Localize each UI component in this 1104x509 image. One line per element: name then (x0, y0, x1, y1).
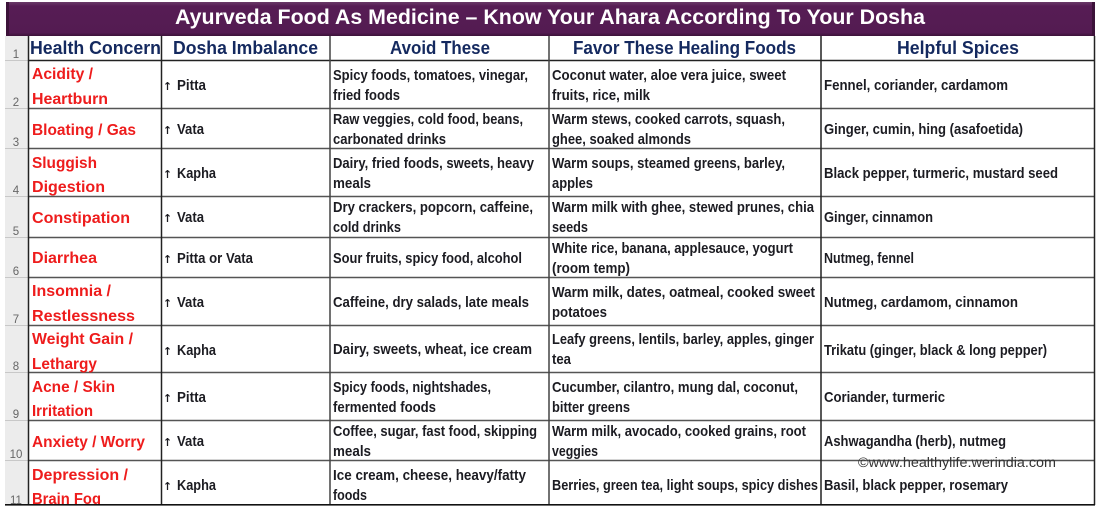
column: helpful spices: Basil, black pepper, rosemary (824, 477, 1009, 494)
column: health concern: Heartburn (32, 91, 108, 108)
column: dosha imbalance: ↑ (163, 212, 172, 225)
row numbers: 1 (13, 49, 19, 61)
row numbers: 7 (13, 314, 19, 326)
column: dosha imbalance: ↑ (163, 436, 172, 449)
column: favor these healing foods: Warm milk, dates, oatmeal, cooked sweet (552, 284, 815, 301)
column: dosha imbalance: ↑ (163, 392, 172, 405)
header row: Health Concern (30, 37, 161, 58)
column: avoid these: foods (333, 487, 367, 504)
column: avoid these: Spicy foods, nightshades, (333, 379, 491, 396)
column: dosha imbalance: ↑ (163, 345, 172, 358)
column: health concern: Diarrhea (32, 250, 97, 267)
column: avoid these: Sour fruits, spicy food, alcohol (333, 250, 522, 267)
row numbers (10, 50, 22, 504)
column: health concern: Restlessness (32, 308, 135, 325)
column: dosha imbalance: Pitta or Vata (177, 250, 254, 267)
column: favor these healing foods: (room temp) (552, 260, 630, 277)
header row: Helpful Spices (897, 37, 1019, 58)
table bottom border (5, 504, 1095, 506)
column: dosha imbalance: ↑ (163, 253, 172, 266)
column: favor these healing foods: veggies (552, 443, 598, 460)
column: dosha imbalance: ↑ (163, 168, 172, 181)
column: health concern: Digestion (32, 179, 105, 196)
column: avoid these: Dry crackers, popcorn, caffeine, (333, 199, 533, 216)
column: favor these healing foods: Coconut water, aloe vera juice, sweet (552, 67, 786, 84)
column: health concern: Anxiety / Worry (32, 434, 145, 451)
column: health concern: Acidity / (32, 66, 94, 83)
column: favor these healing foods: tea (552, 351, 572, 368)
column: avoid these: Dairy, sweets, wheat, ice cream (333, 341, 532, 358)
column: helpful spices: Fennel, coriander, cardamom (824, 77, 1008, 94)
row numbers: 4 (13, 185, 20, 197)
column: favor these healing foods: apples (552, 175, 593, 192)
column: favor these healing foods: Cucumber, cilantro, mung dal, coconut, (552, 379, 798, 396)
column: dosha imbalance: Pitta (177, 77, 207, 94)
column: favor these healing foods: ghee, soaked almonds (552, 131, 691, 148)
column: favor these healing foods: Leafy greens, lentils, barley, apples, ginger (552, 331, 814, 348)
column: favor these healing foods: Warm milk with ghee, stewed prunes, chia (552, 199, 815, 216)
column: avoid these: fermented foods (333, 399, 436, 416)
column: helpful spices: Nutmeg, fennel (824, 250, 914, 267)
column: avoid these: meals (333, 175, 371, 192)
column: helpful spices: Ginger, cumin, hing (asafoetida) (824, 121, 1023, 138)
row numbers: 6 (13, 266, 19, 278)
column: helpful spices: Black pepper, turmeric, mustard seed (824, 165, 1058, 182)
column: favor these healing foods: fruits, rice, milk (552, 87, 651, 104)
header row (31, 40, 1018, 58)
column: dosha imbalance: Vata (177, 209, 205, 226)
column: health concern: Irritation (32, 403, 93, 420)
column: dosha imbalance: ↑ (163, 124, 172, 137)
column: avoid these: Ice cream, cheese, heavy/fatty (333, 467, 527, 484)
column: health concern: Insomnia / (32, 283, 112, 300)
column: favor these healing foods: Warm stews, cooked carrots, squash, (552, 111, 785, 128)
column: favor these healing foods: Berries, green tea, light soups, spicy dishes (552, 477, 818, 494)
column: helpful spices: Ashwagandha (herb), nutmeg (824, 433, 1006, 450)
title: Ayurveda Food As Medicine – Know Your Ahara According To Your Dosha (175, 5, 926, 29)
column: favor these healing foods: potatoes (552, 304, 607, 321)
column: dosha imbalance: Kapha (177, 165, 217, 182)
watermark: ©www.healthylife.werindia.com (858, 455, 1056, 470)
column: avoid these: meals (333, 443, 371, 460)
column: helpful spices: Trikatu (ginger, black & long pepper) (824, 342, 1047, 359)
column: avoid these (333, 67, 537, 504)
column: health concern: Bloating / Gas (32, 122, 136, 139)
column: avoid these: Dairy, fried foods, sweets, heavy (333, 155, 535, 172)
column: favor these healing foods: bitter greens (552, 399, 630, 416)
column: favor these healing foods (552, 67, 818, 494)
row numbers: 11 (10, 495, 22, 507)
column: avoid these: Raw veggies, cold food, beans, (333, 111, 523, 128)
column: dosha imbalance: ↑ (163, 480, 172, 493)
column: health concern: Depression / (32, 467, 129, 484)
header row: Dosha Imbalance (173, 37, 318, 58)
row numbers: 3 (13, 137, 19, 149)
column: dosha imbalance: Pitta (177, 389, 207, 406)
column: helpful spices: Nutmeg, cardamom, cinnamon (824, 294, 1018, 311)
column: helpful spices (824, 77, 1058, 494)
column: dosha imbalance: Vata (177, 433, 205, 450)
row numbers: 10 (10, 449, 22, 461)
column: avoid these: Coffee, sugar, fast food, skipping (333, 423, 537, 440)
column: health concern: Sluggish (32, 155, 97, 172)
column: health concern: Lethargy (32, 356, 97, 373)
column: dosha imbalance (163, 77, 254, 494)
column: avoid these: Spicy foods, tomatoes, vinegar, (333, 67, 528, 84)
column: dosha imbalance: ↑ (163, 297, 172, 310)
column: dosha imbalance: Kapha (177, 477, 217, 494)
row numbers: 9 (13, 409, 19, 421)
column: dosha imbalance: ↑ (163, 80, 172, 93)
row numbers: 5 (13, 226, 19, 238)
column: avoid these: cold drinks (333, 219, 401, 236)
column: favor these healing foods: White rice, banana, applesauce, yogurt (552, 240, 793, 257)
column: dosha imbalance: Kapha (177, 342, 217, 359)
column: health concern: Brain Fog (32, 491, 101, 508)
column: helpful spices: Ginger, cinnamon (824, 209, 933, 226)
title banner (6, 2, 1095, 36)
column: dosha imbalance: Vata (177, 121, 205, 138)
column: favor these healing foods: seeds (552, 219, 588, 236)
row numbers: 2 (13, 97, 19, 109)
header row: Favor These Healing Foods (573, 37, 796, 58)
column: helpful spices: Coriander, turmeric (824, 389, 945, 406)
column: health concern: Constipation (32, 210, 130, 227)
column: health concern (32, 66, 145, 508)
column: health concern: Weight Gain / (32, 331, 134, 348)
header row: Avoid These (390, 37, 490, 58)
column: avoid these: Caffeine, dry salads, late meals (333, 294, 529, 311)
column: favor these healing foods: Warm soups, steamed greens, barley, (552, 155, 785, 172)
column: avoid these: fried foods (333, 87, 400, 104)
column: avoid these: carbonated drinks (333, 131, 446, 148)
column: health concern: Acne / Skin (32, 379, 115, 396)
column: favor these healing foods: Warm milk, avocado, cooked grains, root (552, 423, 806, 440)
column: dosha imbalance: Vata (177, 294, 205, 311)
row numbers: 8 (13, 361, 19, 373)
